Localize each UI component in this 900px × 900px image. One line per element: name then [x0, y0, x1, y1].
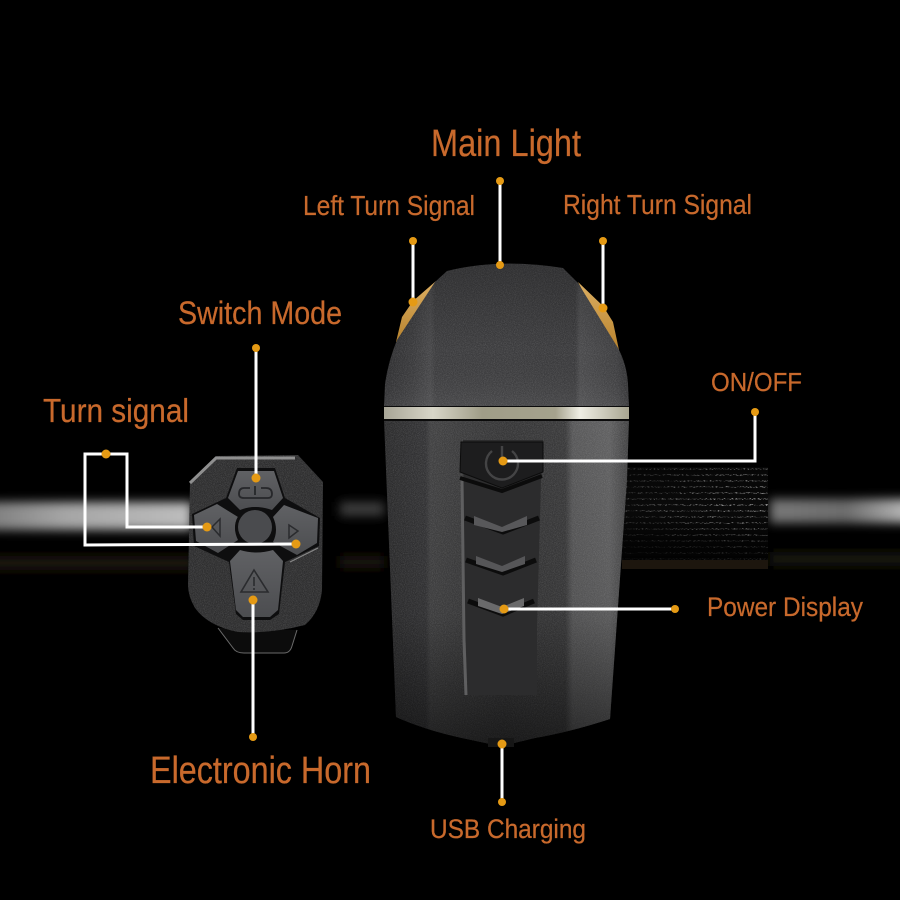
label: power display: Power Display	[707, 592, 863, 622]
remote: centre button	[235, 507, 275, 547]
light: battery indicator 3	[468, 598, 534, 614]
label: on/off: ON/OFF	[711, 367, 802, 397]
light: silver band	[384, 406, 629, 421]
light: usb port	[488, 738, 514, 747]
remote: warning glyph	[241, 570, 268, 592]
callout: right turn signal	[598, 237, 608, 312]
remote: button recess	[192, 468, 320, 620]
light: right amber turn signal	[578, 282, 619, 350]
callout: turn signal	[85, 450, 300, 548]
remote: right button	[273, 505, 318, 555]
remote: body	[188, 455, 323, 632]
remote: bottom button	[230, 550, 283, 617]
callout: main light	[496, 177, 504, 269]
handlebar: segment between remote and light	[340, 502, 384, 568]
light: battery indicator 1	[465, 516, 539, 532]
remote: right arrow glyph	[289, 525, 298, 538]
light: power button plate	[460, 442, 543, 488]
callout: usb charging	[498, 740, 506, 806]
callout: switch mode	[252, 344, 260, 482]
bike light	[384, 264, 629, 747]
remote: right edge highlight	[290, 548, 318, 562]
infographic: bike light and remote diagram	[0, 128, 900, 844]
label: right turn signal: Right Turn Signal	[563, 189, 752, 220]
callout lines and dots	[85, 177, 759, 806]
remote: lower clip	[218, 628, 297, 653]
callout: electronic horn	[248, 596, 258, 741]
label: electronic horn: Electronic Horn	[150, 750, 371, 792]
light: control panel column	[463, 440, 543, 695]
label: main light: Main Light	[431, 123, 581, 165]
light: dome	[384, 264, 629, 407]
light: power glyph	[486, 446, 518, 479]
remote: power glyph	[239, 486, 272, 498]
remote control	[188, 455, 323, 653]
remote: top highlight	[190, 458, 295, 483]
label: left turn signal: Left Turn Signal	[303, 190, 475, 221]
handlebar: left section	[0, 502, 192, 570]
light: battery indicator 2	[466, 556, 536, 573]
remote: left button	[194, 504, 238, 553]
callout: left turn signal	[408, 237, 418, 306]
callout: power display	[500, 604, 679, 614]
remote: top button	[228, 471, 283, 510]
light: left amber turn signal	[396, 281, 436, 342]
label: turn signal: Turn signal	[43, 392, 189, 429]
callout: on/off	[498, 408, 759, 466]
label: switch mode: Switch Mode	[178, 295, 342, 331]
handlebar: right section with grip	[622, 467, 900, 569]
remote: left arrow glyph	[212, 519, 220, 536]
label: usb charging: USB Charging	[430, 814, 586, 844]
light: body	[384, 420, 629, 744]
